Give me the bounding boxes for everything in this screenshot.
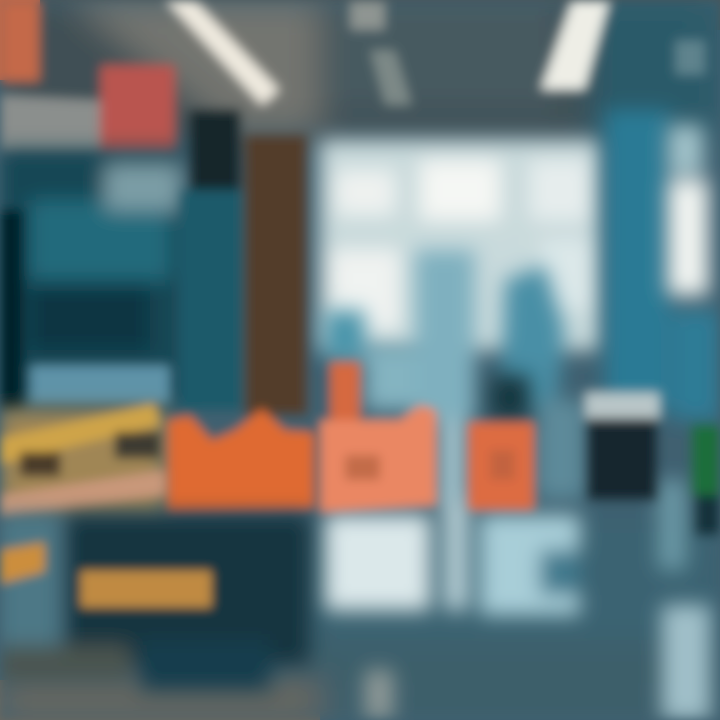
floor [0, 520, 720, 720]
desk counter [0, 410, 165, 510]
dark object and plant at right [585, 392, 720, 535]
window wall [320, 140, 600, 350]
ceiling lights [165, 0, 705, 106]
brown column [245, 135, 307, 415]
lower-left dark furniture [0, 515, 310, 690]
right blue column and window [605, 110, 720, 420]
top-left signs [0, 0, 175, 150]
orange labels [0, 542, 212, 608]
left dark glass wall [0, 150, 185, 405]
people / towers in centre [325, 250, 586, 510]
ceiling [0, 0, 720, 140]
dark column [180, 110, 242, 410]
orange signs [168, 408, 314, 510]
floor reflections [325, 480, 710, 720]
